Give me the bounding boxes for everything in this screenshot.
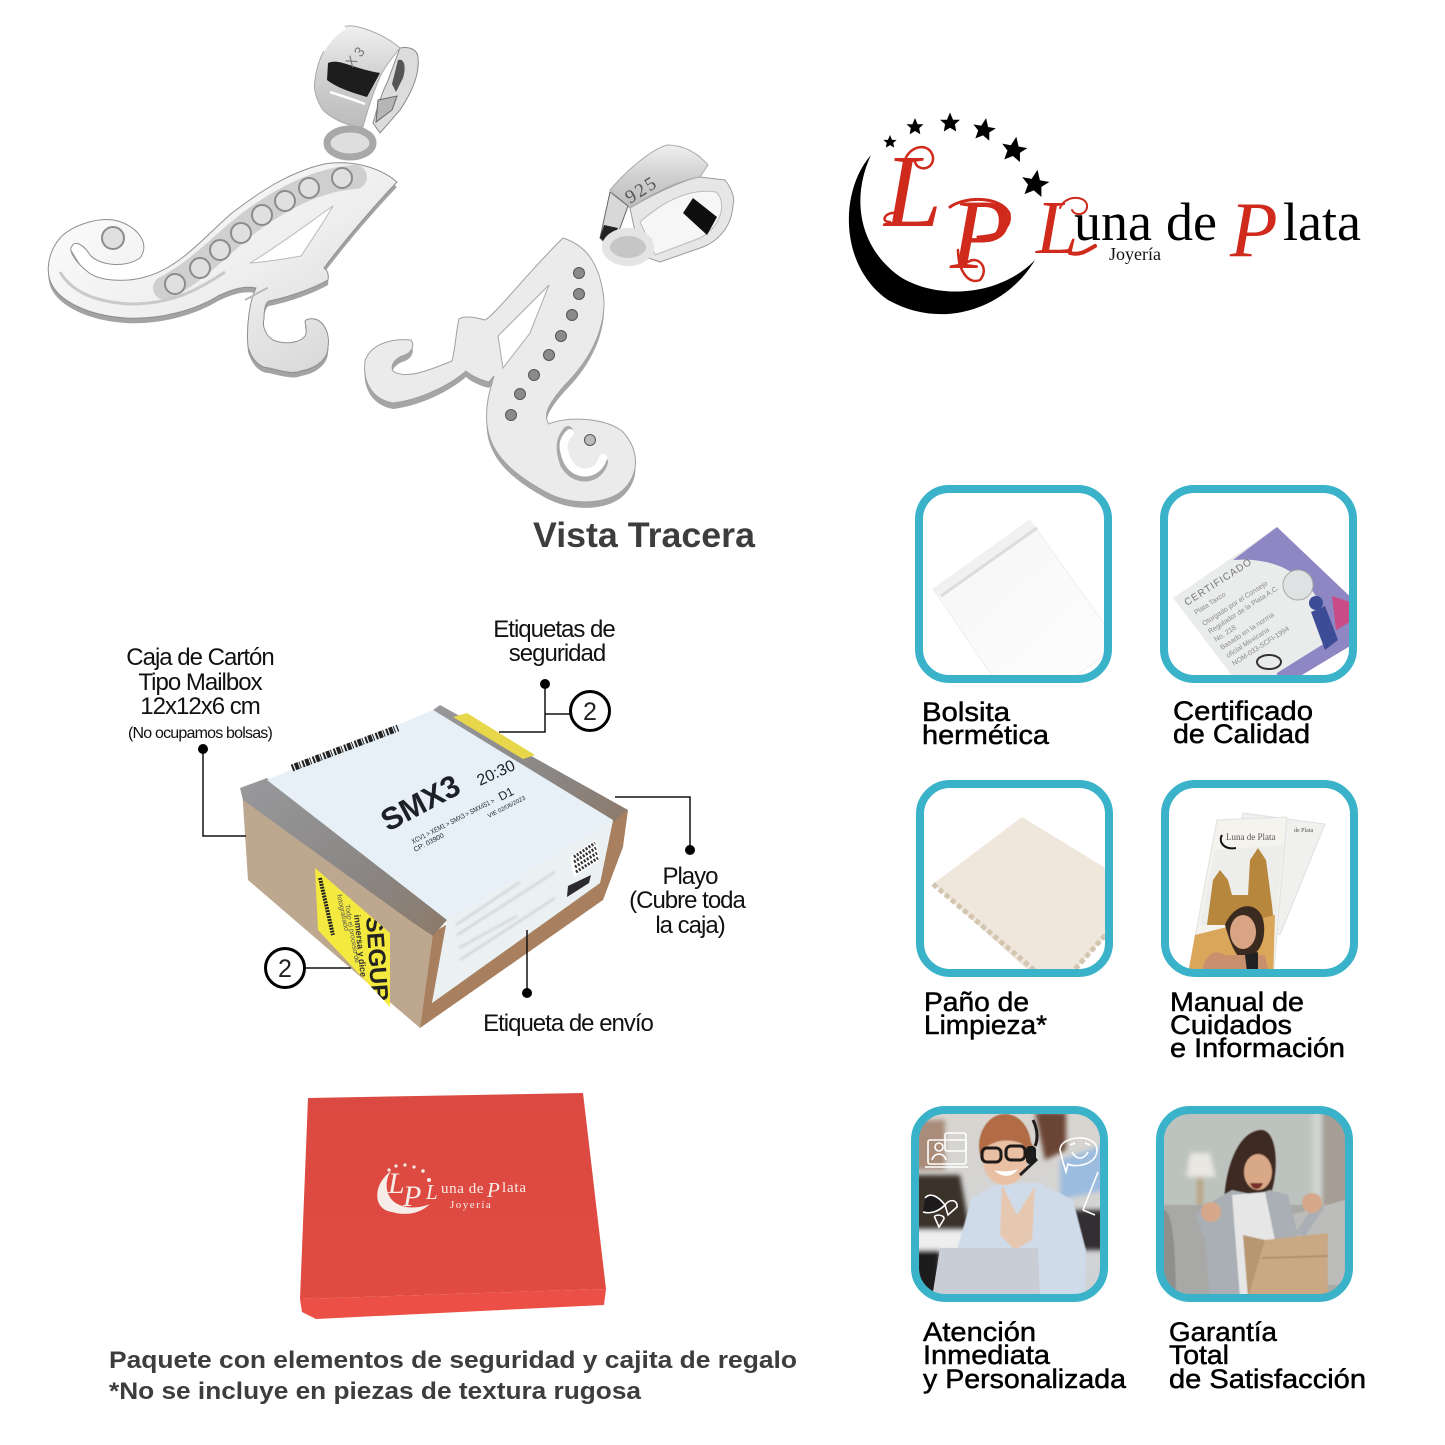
caption: de Calidad — [1173, 719, 1310, 749]
panel: paño de limpieza — [920, 784, 1112, 1040]
gift box logo: P — [402, 1180, 421, 1213]
bail of front pendant — [314, 26, 418, 157]
callout: etiqueta de envío — [483, 930, 654, 1037]
body of back letter A — [365, 238, 636, 508]
heading: back view: Vista Tracera — [533, 516, 756, 555]
caption: Cuidados — [1170, 1010, 1292, 1040]
caption: Paño de — [924, 987, 1029, 1017]
caption — [1170, 987, 1345, 1063]
stone holes — [506, 268, 596, 446]
right face of box — [420, 810, 628, 1028]
label texts: CP: 03900 — [413, 832, 445, 854]
callout: etiqueta de envío: Etiqueta de envío — [483, 1010, 654, 1037]
caption: Limpieza* — [924, 1010, 1048, 1040]
yellow seal side: fotografiado — [335, 894, 350, 932]
caption: Manual de — [1170, 987, 1304, 1017]
callout: caja de cartón: Caja de Cartón — [126, 644, 274, 671]
yellow seal side: SEGUR — [360, 916, 393, 1003]
certificate image: Regulador de la Plata A.C. — [1207, 585, 1280, 636]
caption — [1173, 696, 1313, 749]
label texts: XCV1 > XEM1 > SMX3 > SMX451 > — [411, 798, 496, 846]
caption: Inmediata — [923, 1340, 1051, 1370]
panel: certificado de calidad — [1164, 489, 1360, 749]
panel: garantía total — [1160, 1110, 1366, 1394]
callout: playo: la caja) — [655, 912, 725, 939]
customer photo — [1160, 1110, 1350, 1298]
certificate image: Otorgado por el Consejo — [1201, 580, 1269, 628]
yellow seal side — [315, 868, 393, 1007]
yellow seal side: Todo el proceso de — [343, 904, 360, 964]
callout: caja de cartón: Tipo Mailbox — [138, 669, 263, 696]
wordmark: L — [1035, 186, 1078, 270]
red gift box — [300, 1093, 606, 1319]
brochure image: de Plata — [1294, 828, 1313, 834]
pendant back view — [365, 145, 734, 508]
label texts: SMX3 — [375, 768, 466, 838]
cloth image — [933, 817, 1112, 975]
brochure image — [1187, 813, 1325, 980]
callout: playo — [615, 797, 747, 939]
shipping box diagram — [240, 705, 628, 1028]
plastic band left — [240, 778, 447, 936]
bail of back pendant — [600, 145, 734, 262]
brochure image: Luna de Plata — [1226, 832, 1275, 842]
certificate image: Plata Taxco — [1193, 591, 1227, 617]
bottom note: *No se incluye en piezas de textura rugosa — [109, 1378, 642, 1405]
bottom note: Paquete con elementos de seguridad y cajita de regalo — [109, 1347, 797, 1374]
callout: playo: (Cubre toda — [629, 887, 747, 914]
pendant front view — [48, 26, 418, 377]
caption: e Información — [1170, 1033, 1345, 1063]
monogram LP: L — [882, 134, 942, 249]
bail of back pendant: 925 — [622, 172, 662, 208]
panel: atención personalizada — [915, 1110, 1127, 1394]
gift box logo: una de — [441, 1181, 484, 1197]
QR code and tag — [567, 839, 600, 897]
barcode — [292, 728, 398, 768]
callout: etiquetas de seguridad: seguridad — [509, 640, 605, 667]
caption: hermética — [922, 720, 1050, 750]
wordmark: P — [1229, 186, 1278, 273]
callout: side seal count: 2 — [278, 955, 292, 983]
bag image — [933, 520, 1105, 680]
shipping label — [267, 710, 613, 1003]
yellow seal top — [453, 713, 535, 759]
caption: Bolsita — [922, 697, 1011, 727]
gift box logo: L — [425, 1180, 438, 1204]
label texts — [375, 757, 527, 854]
gift box logo: Joyería — [450, 1199, 492, 1211]
gift box logo: P — [486, 1178, 500, 1202]
certificate image: CERTIFICADO — [1183, 556, 1255, 609]
bottom note — [109, 1347, 797, 1405]
caption — [924, 987, 1048, 1040]
label texts: 20:30 — [475, 757, 518, 790]
gift box logo — [377, 1163, 527, 1214]
callout: etiquetas de seguridad: 2 — [583, 698, 597, 726]
caption — [1169, 1317, 1366, 1394]
caption: Garantía — [1169, 1317, 1278, 1347]
crescent moon — [849, 155, 1035, 314]
caption: Total — [1169, 1340, 1229, 1370]
blurred address lines — [456, 872, 555, 960]
callout: playo: Playo — [662, 863, 718, 890]
wordmark — [1035, 186, 1361, 273]
monogram LP — [882, 134, 1011, 290]
zirconia stones row — [102, 168, 352, 294]
support agent photo — [915, 1110, 1104, 1300]
callout: caja de cartón: (No ocupamos bolsas) — [128, 725, 273, 742]
gift box logo: lata — [502, 1180, 527, 1196]
yellow seal side: inmersa y dice — [352, 914, 368, 977]
certificate image: Basado en la norma — [1219, 612, 1276, 652]
caption: de Satisfacción — [1169, 1364, 1366, 1394]
callout: etiquetas de seguridad: Etiquetas de — [493, 616, 615, 643]
certificate image — [1173, 527, 1349, 675]
callout: caja de cartón — [126, 644, 274, 836]
caption — [922, 697, 1050, 750]
left face of box — [242, 780, 447, 1028]
wordmark: de — [1166, 192, 1217, 252]
gift box logo: L — [387, 1167, 405, 1200]
bail of front pendant: X 3 — [342, 43, 368, 70]
stars — [883, 112, 1051, 198]
panel: bolsita hermética — [919, 489, 1108, 750]
body of front letter A — [48, 163, 397, 377]
certificate image: oficial Mexicana — [1225, 627, 1271, 660]
caption: Certificado — [1173, 696, 1313, 726]
wordmark: Joyería — [1109, 244, 1161, 264]
plastic band back — [433, 705, 628, 822]
label texts: VIE 02/06/2023 — [487, 795, 527, 820]
panel: manual de cuidados — [1165, 784, 1354, 1063]
label texts: D1 — [496, 784, 516, 804]
callout: etiquetas de seguridad — [493, 616, 615, 732]
caption: y Personalizada — [923, 1364, 1127, 1394]
callout: caja de cartón: 12x12x6 cm — [140, 693, 260, 720]
wordmark: lata — [1283, 192, 1361, 252]
certificate image: NOM-033-SCFI-1994 — [1231, 626, 1291, 668]
monogram LP: P — [949, 179, 1011, 290]
caption — [923, 1317, 1127, 1394]
certificate image: No. 218 — [1213, 624, 1238, 644]
logo: Luna de Plata — [849, 112, 1361, 314]
callout: side seal count — [266, 948, 351, 988]
wordmark: una — [1074, 192, 1152, 252]
caption: Atención — [923, 1317, 1036, 1347]
